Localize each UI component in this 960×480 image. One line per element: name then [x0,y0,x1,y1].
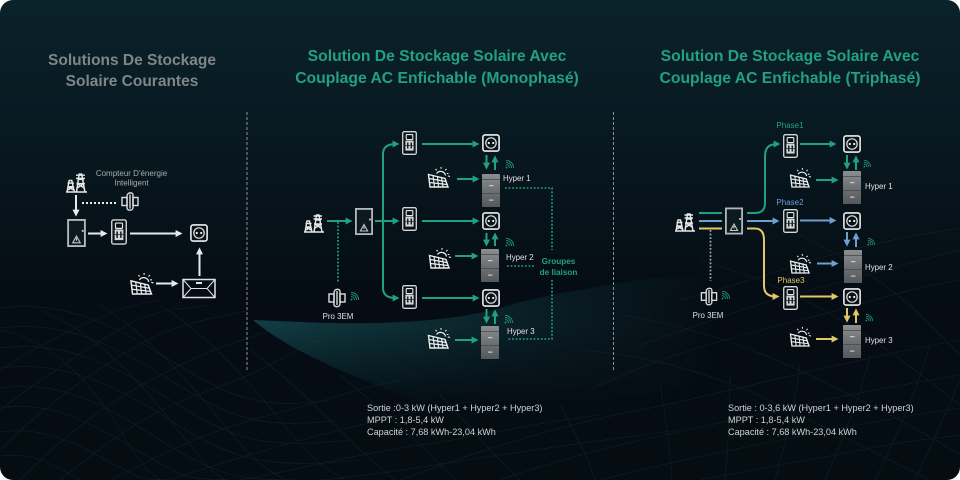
heading: single-phase: Couplage AC Enfichable (Monophasé) [295,70,579,87]
label: Pro 3EM: Pro 3EM [693,311,723,320]
specs: three-phase: Sortie : 0-3,6 kW (Hyper1 + Hyper2 + Hyper3) [728,403,914,413]
heading: three-phase: Solution De Stockage Solaire Avec [661,48,920,65]
background: teal hill [253,282,641,386]
unit: Hyper 3: Hyper 3 [507,327,535,336]
specs: three-phase: MPPT : 1,8-5,4 kW [728,415,805,425]
unit: phase 1 [747,121,893,213]
unit: Hyper 3 [403,286,535,359]
specs: three-phase: Capacité : 7,68 kWh-23,04 kWh [728,427,857,437]
heading: standard solutions: Solutions De Stockage [48,52,216,69]
unit: phase 1: Phase1 [776,121,804,130]
divider left [246,112,248,370]
phase lines: input [699,213,722,228]
arrow: meter to socket [130,232,179,234]
heading: single-phase: Solution De Stockage Solaire Avec [308,48,567,65]
specs: single-phase: MPPT : 1,8-5,4 kW [367,415,444,425]
icon: wifi [350,292,359,300]
label: smart meter: Compteur D'énergie [96,169,168,178]
icon: breaker box [356,209,372,234]
label: Pro 3EM: Pro 3EM [323,312,353,321]
link: meter reading [82,202,116,204]
icon: breaker box [726,208,742,234]
icon: Pro 3EM clamp [329,289,345,307]
icon: Pro 3EM clamp [701,288,717,305]
heading: standard solutions: Solaire Courantes [66,73,198,90]
arrow: panel to inverter [156,282,175,284]
unit: Hyper 1 [403,132,531,207]
icon: breaker box [68,220,85,246]
unit: phase 3: Hyper 3 [865,336,893,345]
unit: phase 2: Hyper 2 [865,263,893,272]
label: link groups: Groupes [542,257,576,266]
label: smart meter: Intelligent [114,178,149,188]
icon: clamp meter [122,193,138,210]
link: Pro 3EM reading [337,222,339,283]
icon: socket [191,225,207,241]
group link: dotted [505,188,552,339]
panel: standard solar storage [48,52,216,298]
link: Pro 3EM reading [710,230,712,281]
arrow: pylon to breaker [75,195,77,213]
icon: solar panel [131,273,154,294]
arrow: inverter to socket [198,251,200,276]
panel: single-phase AC coupling [295,48,579,437]
unit: Hyper 1: Hyper 1 [503,174,531,183]
background: wire mesh terrain [0,228,960,480]
label: link groups: de liaison [540,268,577,277]
panel: three-phase AC coupling [660,48,920,437]
icon: pylon [66,174,87,192]
unit: phase 1: Hyper 1 [865,182,893,191]
specs: single-phase: Sortie :0-3 kW (Hyper1 + Hyper2 + Hyper3) [367,403,542,413]
arrows: distribution trunk [375,144,396,298]
unit: Hyper 2 [403,208,534,282]
icon: wall meter [112,220,126,244]
icon: pylon [675,214,695,231]
unit: phase 2: Phase2 [776,198,804,207]
heading: three-phase: Couplage AC Enfichable (Triphasé) [660,70,920,87]
arrow: breaker to meter [88,232,104,234]
icon: pylon [304,215,324,232]
unit: phase 2 [747,198,893,283]
icon: micro inverter [183,280,215,298]
unit: phase 3 [747,228,893,358]
unit: Hyper 2: Hyper 2 [506,253,534,262]
unit: phase 3: Phase3 [777,276,805,285]
arrow: pylon to breaker [327,220,349,222]
icon: wifi [722,291,730,300]
specs: single-phase: Capacité : 7,68 kWh-23,04 kWh [367,427,496,437]
divider right [612,112,614,370]
